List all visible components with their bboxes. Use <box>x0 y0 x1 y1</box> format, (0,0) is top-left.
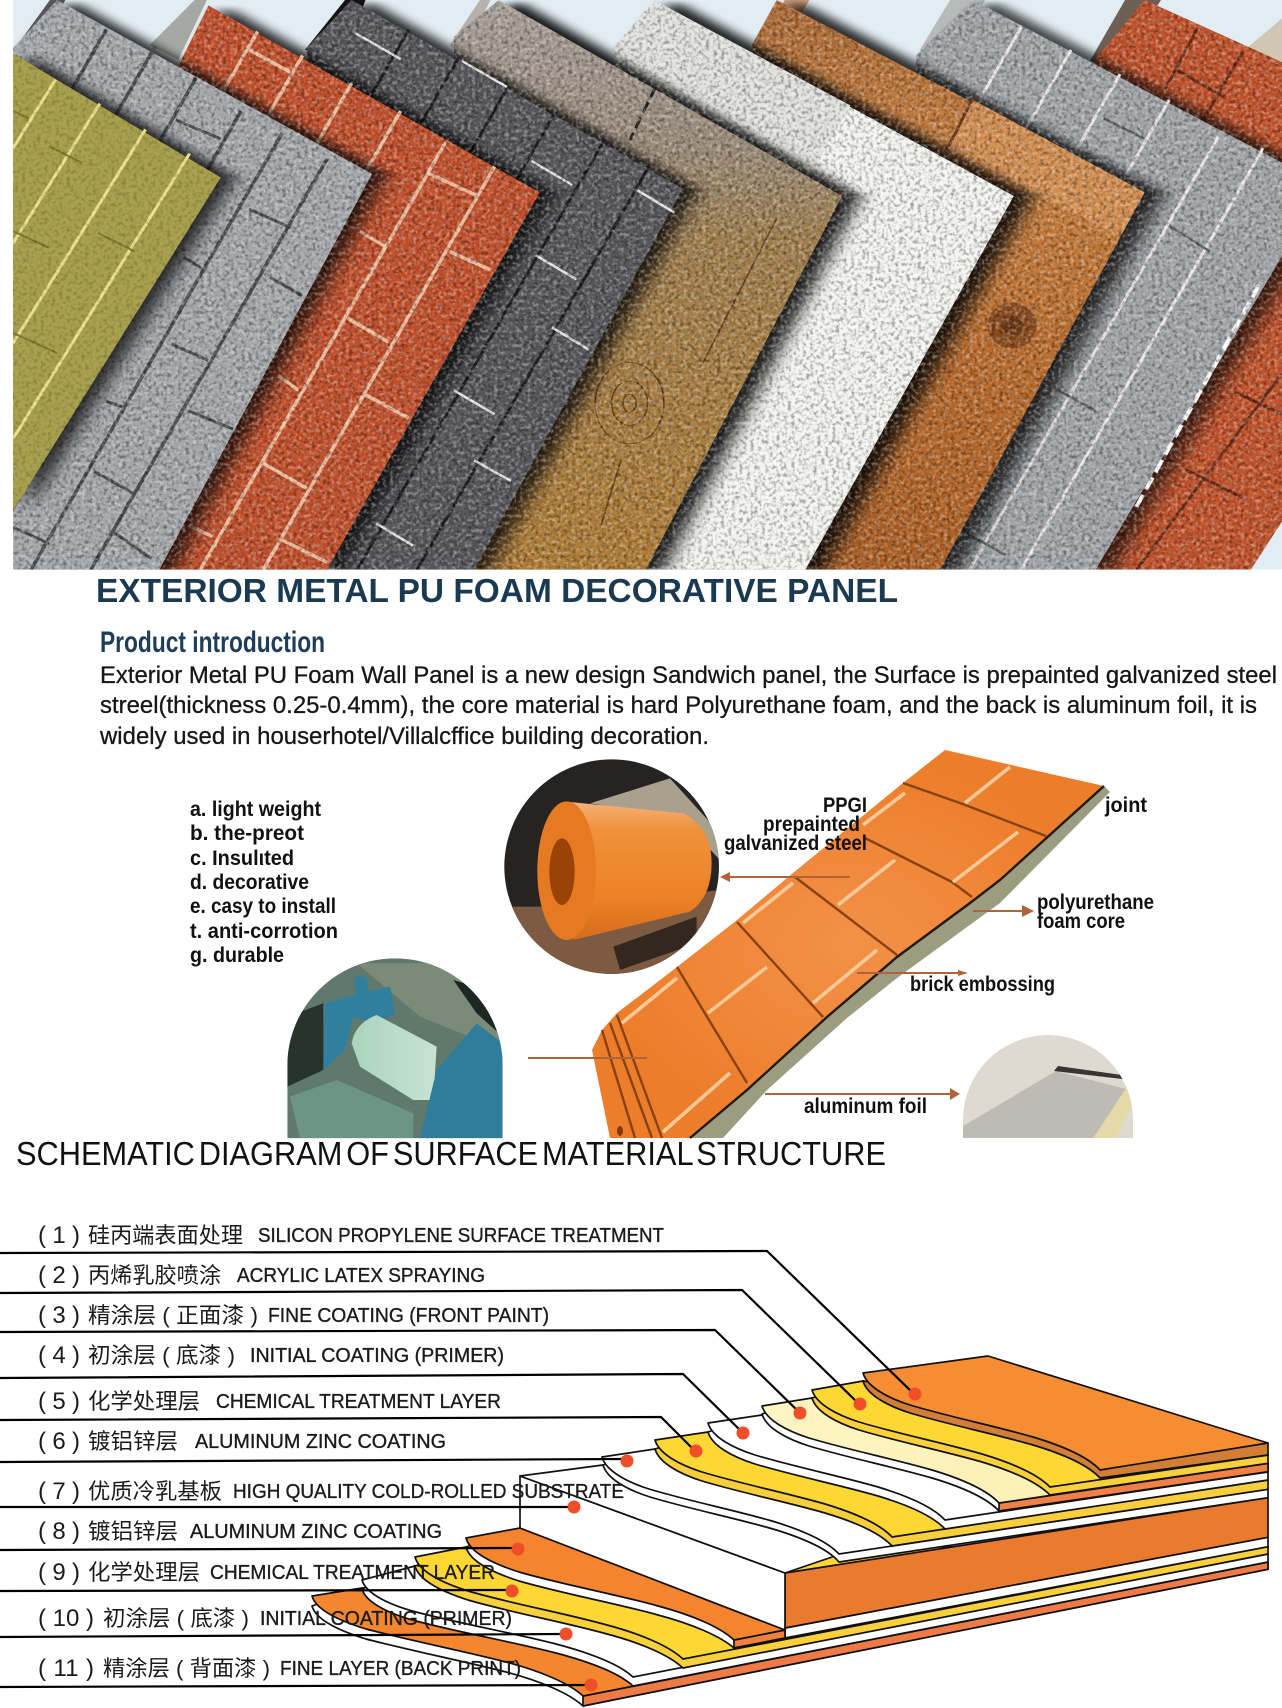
label 4: ( 4 ) <box>38 1342 80 1369</box>
layer 9: chemical treatment <box>415 1547 1268 1668</box>
label 11: FINE LAYER (BACK PRINT) <box>280 1658 521 1680</box>
feature list: b. the-preot <box>190 822 304 845</box>
label: joint: joint <box>1104 794 1147 817</box>
label 9: CHEMICAL TREATMENT LAYER <box>210 1562 495 1584</box>
panel: orange wood grain <box>752 0 1145 570</box>
layer 4: initial coating <box>708 1415 1268 1529</box>
label 7: HIGH QUALITY COLD-ROLLED SUBSTRATE <box>233 1481 624 1503</box>
arrow: coil callout <box>720 872 850 882</box>
arrow: brick embossing callout <box>857 970 968 976</box>
marker dots <box>506 1388 922 1692</box>
product structure illustration <box>287 750 1137 1140</box>
panel: dark grey brick <box>98 0 683 570</box>
label: brick embossing: brick embossing <box>910 973 1055 996</box>
photo: aluminum foil backing <box>963 1035 1133 1138</box>
label 8: ALUMINUM ZINC COATING <box>190 1521 442 1543</box>
feature list: a. light weight <box>190 798 321 821</box>
label 2: ( 2 ) <box>38 1262 80 1289</box>
label 5: CHEMICAL TREATMENT LAYER <box>216 1391 501 1413</box>
label 7 <box>38 1478 624 1505</box>
label 6: ( 6 ) <box>38 1428 80 1455</box>
layer 6: aluminum zinc coating <box>602 1449 1268 1562</box>
label 9: 化学处理层 <box>88 1560 200 1585</box>
diagram: layered surface material structure <box>312 1356 1268 1706</box>
label 4 <box>38 1342 504 1369</box>
label 5 <box>38 1388 501 1415</box>
panel: light grey brick <box>0 0 372 570</box>
photo: orange PPGI coil <box>500 757 727 977</box>
layer 1: silicon propylene surface <box>863 1356 1268 1478</box>
label: polyurethane foam core <box>1037 891 1154 933</box>
panel: grey brick right <box>916 0 1282 570</box>
label 2: ACRYLIC LATEX SPRAYING <box>237 1265 485 1287</box>
feature list: g. durable <box>190 944 284 967</box>
feature list: c. Insulιted <box>190 847 294 870</box>
layer 11: back fine coat <box>312 1562 1268 1706</box>
label 8 <box>38 1518 442 1545</box>
label 6: 镀铝锌层 <box>88 1429 178 1454</box>
label 10: 初涂层 ( 底漆 ) <box>103 1606 249 1631</box>
label 1: ( 1 ) <box>38 1222 80 1249</box>
label: polyurethane foam core: polyurethane <box>1037 891 1154 914</box>
heading: product introduction: Product introduction <box>100 626 325 659</box>
label 2 <box>38 1262 485 1289</box>
label: PPGI prepainted galvanized steel: galvanized steel <box>724 832 867 855</box>
feature list: d. decorative <box>190 871 309 894</box>
photo texture <box>13 0 1282 570</box>
label: aluminum foil: aluminum foil <box>804 1095 927 1118</box>
heading: schematic diagram: SCHEMATIC DIAGRAM OF SURFACE MATERIAL STRUCTURE <box>16 1135 886 1172</box>
label 7: ( 7 ) <box>38 1478 80 1505</box>
layer labels <box>38 1222 664 1682</box>
label 6 <box>38 1428 446 1455</box>
label: polyurethane foam core: foam core <box>1037 910 1125 933</box>
label: PPGI prepainted galvanized steel: prepainted <box>763 813 860 836</box>
text block: product introduction body <box>99 662 1277 750</box>
label: PPGI prepainted galvanized steel: PPGI <box>823 794 867 817</box>
label 1 <box>38 1222 664 1249</box>
feature list <box>190 798 338 967</box>
text block: product introduction body: Exterior Metal PU Foam Wall Panel is a new design Sandwich panel, the Surface is prepainted galvanized steel <box>100 662 1277 689</box>
label 5: ( 5 ) <box>38 1388 80 1415</box>
panel: red brick <box>0 6 540 570</box>
leader lines <box>0 1251 914 1687</box>
layer 2: acrylic latex <box>812 1381 1268 1495</box>
layer 7: cold rolled substrate block <box>520 1465 1268 1630</box>
label 2: 丙烯乳胶喷涂 <box>88 1263 221 1288</box>
layer 5: chemical treatment <box>655 1432 1268 1546</box>
panel: olive brick <box>13 37 226 518</box>
arrow: foam core callout <box>973 905 1034 917</box>
panel: white textured <box>613 0 1014 570</box>
feature list: e. casy to install <box>190 895 336 918</box>
label 11 <box>38 1655 521 1682</box>
panel: red brick right <box>1096 0 1282 570</box>
text block: product introduction body: widely used in houserhotel/Villalcffice building decoration. <box>99 723 709 750</box>
label 3 <box>38 1302 549 1329</box>
label 3: 精涂层 ( 正面漆 ) <box>88 1303 258 1328</box>
label 5: 化学处理层 <box>88 1389 200 1414</box>
photo: assorted decorative metal panels <box>0 0 1282 570</box>
text block: product introduction body: streel(thickness 0.25-0.4mm), the core material is hard Polyurethane foam, and the back is aluminum foil, it is <box>100 692 1257 719</box>
arrow: aluminum foil callout <box>765 1088 960 1100</box>
label 8: ( 8 ) <box>38 1518 80 1545</box>
arrow: machine callout <box>528 1057 647 1059</box>
label 1: 硅丙端表面处理 <box>88 1223 243 1248</box>
label 11: ( 11 ) <box>38 1655 94 1682</box>
label 7: 优质冷乳基板 <box>88 1479 222 1504</box>
feature list: t. anti-corrotion <box>190 920 338 943</box>
label 3: FINE COATING (FRONT PAINT) <box>268 1305 549 1327</box>
label 4: 初涂层 ( 底漆 ) <box>88 1343 235 1368</box>
label 9 <box>38 1559 495 1586</box>
label 1: SILICON PROPYLENE SURFACE TREATMENT <box>258 1225 664 1247</box>
label 10: INITIAL COATING (PRIMER) <box>260 1608 512 1630</box>
label 6: ALUMINUM ZINC COATING <box>195 1431 446 1453</box>
layer 8: aluminum zinc coating <box>466 1528 1268 1648</box>
label 9: ( 9 ) <box>38 1559 80 1586</box>
photo: roll forming machine <box>287 957 507 1140</box>
title: EXTERIOR METAL PU FOAM DECORATIVE PANEL <box>96 572 898 609</box>
label 10 <box>38 1605 512 1632</box>
label 11: 精涂层 ( 背面漆 ) <box>103 1656 270 1681</box>
label: PPGI prepainted galvanized steel <box>724 794 867 855</box>
label 8: 镀铝锌层 <box>88 1519 178 1544</box>
label 4: INITIAL COATING (PRIMER) <box>250 1345 504 1367</box>
label 10: ( 10 ) <box>38 1605 94 1632</box>
panel illustration: orange sandwich panel <box>592 750 1110 1138</box>
label 3: ( 3 ) <box>38 1302 80 1329</box>
layer 3: fine coating <box>762 1398 1268 1511</box>
panel: speckled wood <box>454 0 842 570</box>
layer 10: primer <box>362 1554 1268 1686</box>
